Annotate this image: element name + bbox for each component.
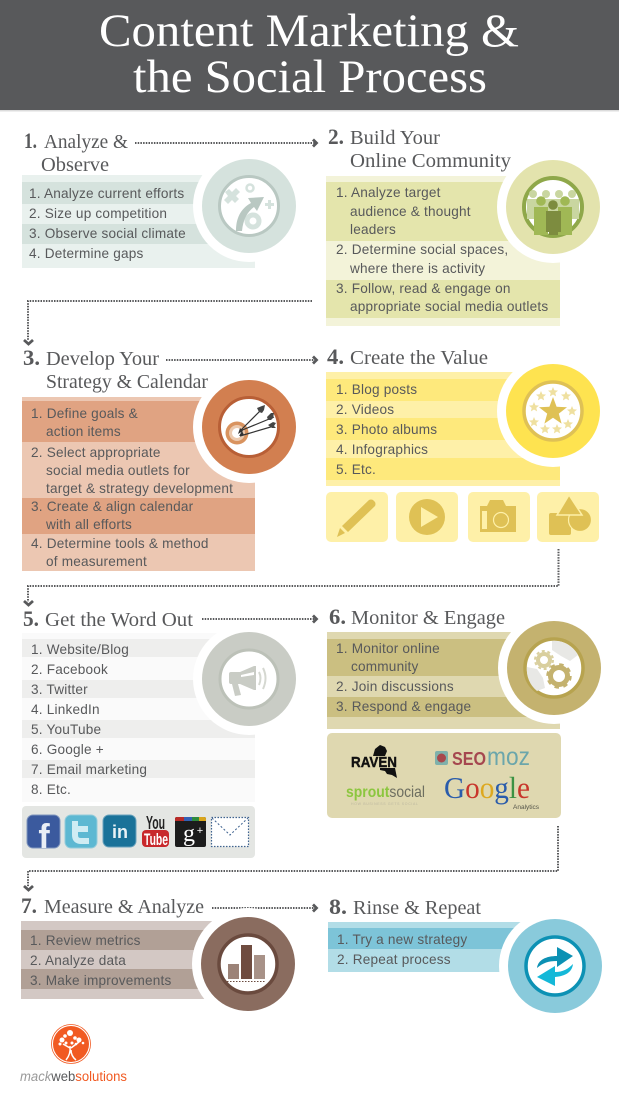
icon: refresh arrows: [499, 910, 611, 1022]
panel: step 6 monitor and engage: [327, 604, 610, 818]
icon: youtube: You: [146, 813, 165, 833]
logo: google analytics: Analytics: [513, 804, 540, 811]
list: step 2: where there is activity: [349, 261, 485, 276]
panel: step 4 create the value: [326, 344, 609, 542]
list: step 4: [326, 372, 560, 486]
list: step 3: 3. Create & align calendar: [31, 499, 194, 514]
list: step 8: [328, 922, 555, 972]
list: step 5: 2. Facebook: [31, 662, 108, 677]
list: step 8: 1. Try a new strategy: [337, 932, 467, 947]
list: step 1: 2. Size up competition: [29, 206, 167, 221]
logo: google analytics: Google: [444, 770, 530, 805]
heading: step 5: 5.: [23, 606, 39, 631]
heading: step 2: 2.: [328, 124, 344, 149]
arrow: step 7 to step 8: [212, 904, 316, 912]
logo: seomoz: moz: [487, 743, 530, 771]
heading: step 7: 7.: [21, 893, 37, 918]
list: step 3: 4. Determine tools & method: [31, 536, 209, 551]
heading: step 3: Strategy & Calendar: [46, 371, 208, 393]
list: step 6: 1. Monitor online: [336, 641, 440, 656]
logo: raven: [351, 745, 397, 778]
list: step 5: 4. LinkedIn: [31, 702, 100, 717]
list: step 5: 5. YouTube: [31, 722, 101, 737]
heading: step 7: Measure & Analyze: [44, 896, 204, 918]
logo: sproutsocial: sproutsocial: [346, 784, 425, 801]
heading: step 2: [328, 124, 511, 172]
icon: stars: [497, 355, 609, 467]
list: step 3: [22, 397, 255, 571]
logo: seomoz: [435, 743, 530, 771]
heading: step 1: Observe: [41, 154, 109, 176]
logo: mack web solutions: mackwebsolutions: [20, 1069, 127, 1084]
icon: megaphone: [193, 623, 305, 735]
icon: target with arrows: [193, 371, 305, 483]
panel: step 1 analyze and observe: [22, 128, 305, 268]
logo: seomoz: SEO: [452, 749, 486, 769]
icon: twitter: [65, 815, 97, 848]
list: step 1: 1. Analyze current efforts: [29, 186, 184, 201]
list: step 2: audience & thought: [350, 204, 471, 219]
logo: raven: RAVEN: [351, 754, 397, 771]
panel: step 8 rinse and repeat: [328, 894, 611, 1022]
panel: step 7 measure and analyze: [21, 893, 304, 1020]
heading: step 8: 8.: [329, 894, 347, 919]
icon: youtube: [142, 813, 169, 849]
icon tile: pencil: [326, 492, 388, 542]
heading: step 1: Analyze &: [44, 131, 128, 153]
list: step 6: 3. Respond & engage: [336, 699, 471, 714]
icon: email envelope: [212, 818, 248, 846]
heading: step 6: Monitor & Engage: [351, 607, 505, 629]
list: step 2: appropriate social media outlets: [350, 299, 548, 314]
list: step 2: leaders: [350, 222, 396, 237]
arrow: step 4 to step 5: [24, 549, 558, 605]
list: step 5: 3. Twitter: [31, 682, 88, 697]
arrow: step 5 to step 6: [202, 616, 316, 622]
arrow: step 2 to step 3: [24, 301, 312, 344]
social icons bar: [22, 806, 255, 858]
list: step 5: [22, 633, 255, 802]
icon: linkedin: in: [112, 822, 128, 842]
heading: step 4: 4.: [327, 344, 344, 369]
icon: facebook: f: [38, 818, 50, 856]
icon: bar chart: [192, 908, 304, 1020]
list: step 2: 3. Follow, read & engage on: [336, 281, 511, 296]
list: step 7: [21, 921, 248, 999]
panel: step 2 build community: [326, 124, 609, 326]
list: step 2: 2. Determine social spaces,: [336, 242, 508, 257]
icon: community people: [497, 151, 609, 263]
icon: youtube: Tube: [144, 830, 168, 849]
list: step 3: 1. Define goals &: [31, 406, 138, 421]
list: step 3: 2. Select appropriate: [31, 445, 161, 460]
icon tile: video play: [396, 492, 458, 542]
heading: step 3: Develop Your: [46, 348, 159, 370]
icon: google plus: +: [197, 825, 203, 837]
arrow: step 6 to step 7: [24, 826, 558, 890]
heading: step 1: [24, 128, 128, 176]
panel: step 3 develop strategy: [22, 345, 305, 571]
list: step 2: 1. Analyze target: [336, 185, 441, 200]
list: step 5: 8. Etc.: [31, 782, 71, 797]
heading: step 5: Get the Word Out: [45, 609, 193, 631]
logo: mack web solutions: [20, 1024, 127, 1084]
heading: step 3: [23, 345, 208, 393]
list: step 3: target & strategy development: [46, 481, 233, 496]
list: step 6: community: [351, 659, 419, 674]
list: step 4: 4. Infographics: [336, 442, 428, 457]
header banner: [0, 0, 619, 112]
list: step 7: 2. Analyze data: [30, 953, 126, 968]
icon: gears: [498, 612, 610, 724]
list: step 5: 7. Email marketing: [31, 762, 147, 777]
heading: step 1: 1.: [24, 128, 37, 153]
title: the Social Process: [133, 51, 487, 103]
panel: step 5 get the word out: [22, 606, 305, 858]
arrow: step 1 to step 2: [135, 140, 316, 146]
list: step 7: 3. Make improvements: [30, 973, 172, 988]
icon: strategy play: [193, 150, 305, 262]
heading: step 3: 3.: [23, 345, 40, 370]
logo: sproutsocial: HOW BUSINESS GETS SOCIAL: [351, 802, 418, 806]
arrow: step 3 to step 4: [166, 356, 316, 364]
list: step 1: 3. Observe social climate: [29, 226, 186, 241]
icon: google plus: [175, 817, 206, 847]
list: step 3: with all efforts: [45, 517, 132, 532]
title: Content Marketing &: [99, 5, 519, 57]
list: step 4: 1. Blog posts: [336, 382, 417, 397]
icon tile: shapes: [537, 492, 599, 542]
list: step 6: 2. Join discussions: [336, 679, 454, 694]
list: step 5: 1. Website/Blog: [31, 642, 129, 657]
list: step 3: action items: [46, 424, 121, 439]
list: step 4: 2. Videos: [336, 402, 394, 417]
list: step 7: 1. Review metrics: [30, 933, 141, 948]
list: step 6: [327, 632, 560, 729]
list: step 1: [22, 175, 255, 268]
list: step 5: 6. Google +: [31, 742, 104, 757]
list: step 1: 4. Determine gaps: [29, 246, 143, 261]
heading: step 2: Build Your: [350, 127, 440, 149]
heading: step 2: Online Community: [350, 150, 511, 172]
list: step 3: of measurement: [46, 554, 147, 569]
icon: google plus: g: [183, 821, 195, 847]
list: step 3: social media outlets for: [46, 463, 190, 478]
icon: linkedin: [103, 815, 136, 847]
list: step 4: 3. Photo albums: [336, 422, 437, 437]
heading: step 6: 6.: [329, 604, 346, 629]
icon tile: camera: [468, 492, 530, 542]
list: step 4: 5. Etc.: [336, 462, 376, 477]
heading: step 8: Rinse & Repeat: [353, 897, 481, 919]
logos panel: [327, 733, 561, 818]
list: step 2: [326, 176, 560, 326]
list: step 8: 2. Repeat process: [337, 952, 451, 967]
heading: step 4: Create the Value: [350, 347, 488, 369]
icon: facebook: [27, 815, 60, 856]
